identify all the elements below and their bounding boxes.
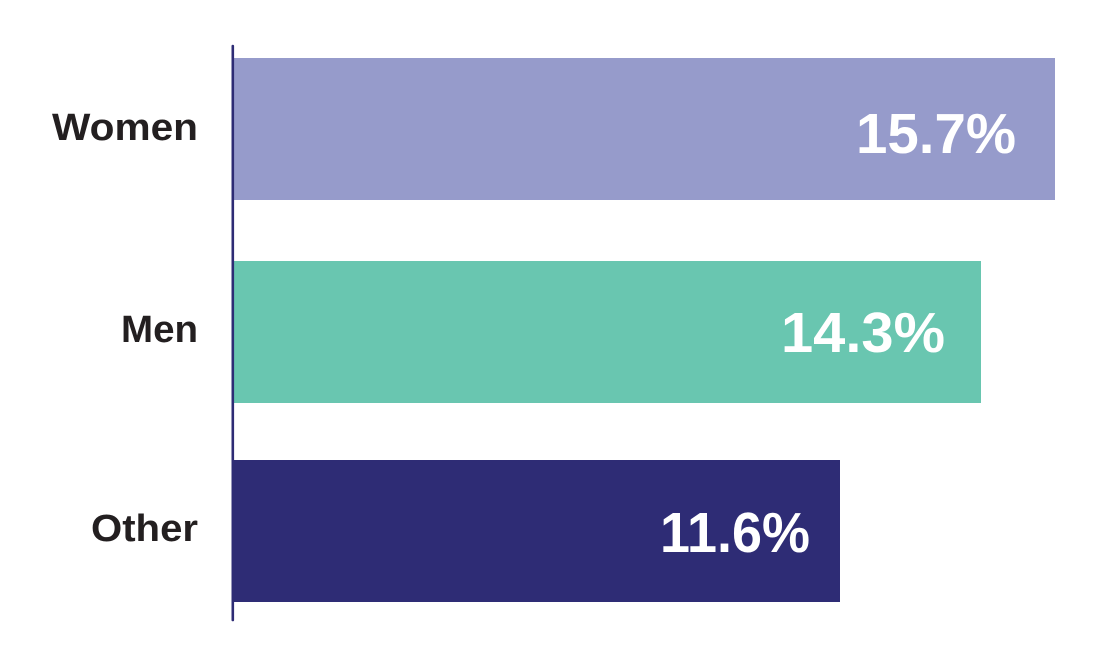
bar: Other: 11.6% [660, 501, 810, 565]
axis line [232, 46, 234, 620]
label: Other: Other [91, 508, 198, 550]
label: Men: Men [121, 309, 198, 351]
bar: Men [233, 261, 981, 403]
label: Women: Women [52, 107, 198, 149]
bar: Women: 15.7% [856, 102, 1016, 166]
bar: Men: 14.3% [781, 301, 945, 365]
bar: Women [233, 58, 1055, 200]
bar: Other [233, 460, 840, 602]
